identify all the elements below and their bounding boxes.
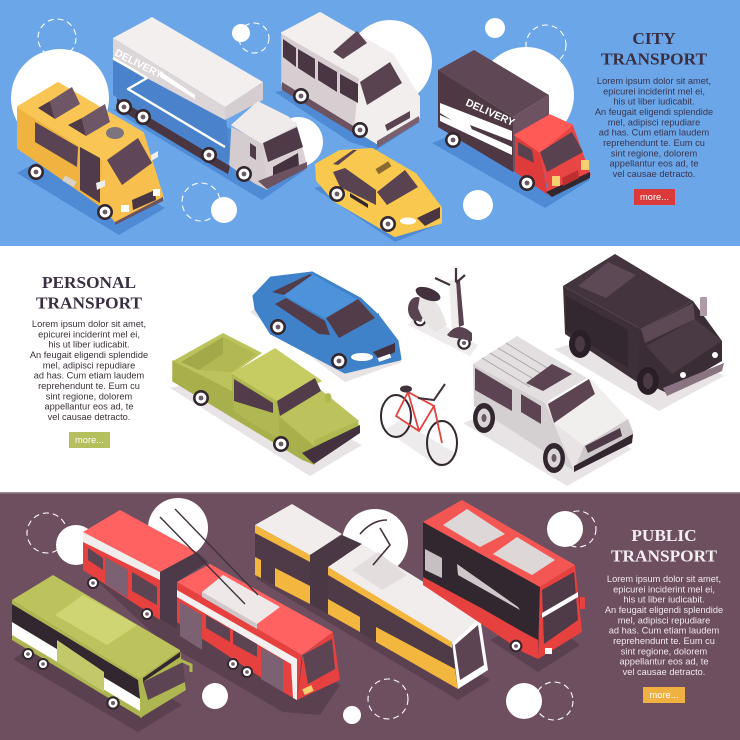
text block: public description: ad has. Cum etiam laudem	[609, 626, 720, 636]
text block: personal description: vel causae detracto.	[48, 412, 130, 422]
vehicle: silver suv	[463, 336, 633, 486]
text block: city description: vel causae detracto.	[613, 169, 695, 179]
heading: public transport: PUBLIC	[631, 526, 697, 545]
heading: city transport	[601, 29, 707, 68]
vehicle: yellow articulated tram	[255, 504, 490, 700]
text block: public description: An feugait eligendi splendide	[605, 605, 723, 615]
vehicle: red bicycle	[381, 384, 458, 468]
text block: public description: sint regione, dolorem	[621, 646, 707, 656]
text block: public description: epicurei inciderint mel ei,	[613, 584, 715, 594]
heading: personal transport	[36, 273, 142, 312]
text block: city description: appellantur eos ad, te	[610, 159, 698, 169]
text block: personal description: An feugait eligendi splendide	[30, 350, 148, 360]
vehicle: red delivery truck	[432, 50, 590, 208]
panel: city transport	[0, 0, 740, 246]
text block: personal description: his ut liber iudicabit.	[48, 340, 130, 350]
text block: public description: Lorem ipsum dolor sit amet,	[607, 574, 721, 584]
vehicle: white delivery truck	[113, 17, 307, 200]
text block: public description: vel causae detracto.	[623, 667, 705, 677]
label: delivery on truck: DELIVERY	[113, 47, 165, 81]
text block: city description: his ut liber iudicabit.	[613, 97, 695, 107]
button: city more: more...	[640, 192, 669, 202]
text block: public description	[605, 574, 723, 677]
heading: personal transport: PERSONAL	[42, 273, 136, 292]
text block: city description: sint regione, dolorem	[611, 148, 697, 158]
vehicle: red articulated trolleybus	[83, 509, 340, 715]
vehicle: scooter	[408, 268, 478, 356]
text block: city description: reprehendunt te. Eum cu	[603, 138, 705, 148]
text block: city description	[595, 76, 713, 179]
text block: personal description: Lorem ipsum dolor sit amet,	[32, 319, 146, 329]
heading: personal transport: TRANSPORT	[36, 294, 142, 312]
text block: personal description: ad has. Cum etiam laudem	[34, 371, 145, 381]
text block: personal description	[30, 319, 148, 422]
panel: public transport	[0, 492, 740, 740]
text block: public description: appellantur eos ad, te	[620, 657, 708, 667]
vehicle: green pickup	[170, 333, 362, 476]
decorative circles: public	[27, 498, 596, 724]
vehicle: double decker bus	[423, 500, 585, 672]
text block: city description: An feugait eligendi splendide	[595, 107, 713, 117]
text block: personal description: epicurei inciderint mel ei,	[38, 329, 140, 339]
heading: city transport: TRANSPORT	[601, 50, 707, 68]
text block: personal description: mel, adipisci repudiare	[43, 360, 135, 370]
text block: city description: ad has. Cum etiam laudem	[599, 128, 710, 138]
heading: city transport: CITY	[632, 29, 676, 48]
decorative circles: city	[11, 18, 574, 223]
button: personal more: more...	[75, 435, 104, 445]
text block: personal description: reprehendunt te. Eum cu	[38, 381, 140, 391]
vehicle: yellow food van	[17, 83, 165, 235]
panel: personal transport	[0, 246, 740, 492]
vehicle: green coach	[12, 575, 191, 732]
button: city more	[634, 189, 675, 205]
vehicle: black suv	[554, 254, 724, 411]
button: public more: more...	[650, 690, 678, 700]
text block: city description: Lorem ipsum dolor sit amet,	[597, 76, 711, 86]
text block: personal description: appellantur eos ad, te	[45, 402, 133, 412]
vehicle: white van	[275, 13, 420, 150]
button: personal more	[69, 432, 110, 448]
heading: public transport	[611, 526, 717, 566]
button: public more	[643, 687, 685, 703]
text block: public description: reprehendunt te. Eum cu	[613, 636, 715, 646]
text block: public description: mel, adipisci repudiare	[618, 615, 710, 625]
vehicle: blue car	[250, 273, 402, 382]
text block: city description: epicurei inciderint mel ei,	[603, 86, 705, 96]
heading: public transport: TRANSPORT	[611, 546, 717, 566]
vehicle: yellow taxi	[314, 150, 440, 242]
text block: personal description: sint regione, dolorem	[46, 391, 132, 401]
label: delivery on red truck: DELIVERY	[464, 97, 516, 129]
text block: city description: mel, adipisci repudiare	[608, 117, 700, 127]
text block: public description: his ut liber iudicabit.	[623, 595, 705, 605]
